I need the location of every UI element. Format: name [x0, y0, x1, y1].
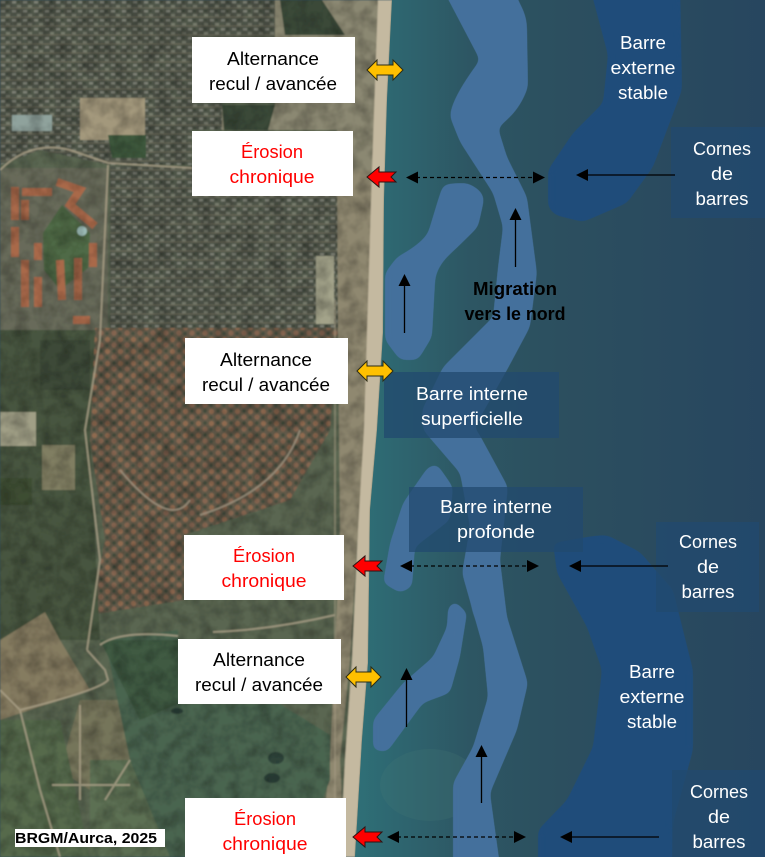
callout: erosion 3: chronique — [222, 834, 308, 854]
panel: cornes de barres 2: barres — [682, 582, 734, 602]
inner bars group — [373, 0, 537, 857]
arrow: dashed width 1 — [406, 172, 545, 184]
callout: alternance 2: recul / avancée — [202, 375, 330, 395]
inner sand bar: serpentine — [422, 0, 537, 857]
label: barre externe stable north: externe — [610, 58, 676, 78]
callout: alternance 1: recul / avancée — [209, 74, 337, 94]
panel: cornes de barres 3: barres — [692, 832, 746, 852]
panel: barre interne profonde — [409, 487, 583, 552]
tracks and roads — [0, 148, 335, 857]
resort and sandy lot — [12, 98, 146, 158]
label: migration vers le nord — [464, 279, 566, 324]
arrow: red 1 — [367, 167, 396, 187]
arrow: migration north 1 — [510, 208, 522, 267]
southern dune strip — [320, 170, 376, 857]
label: migration vers le nord: Migration — [473, 279, 557, 299]
panel: barre interne profonde: profonde — [457, 522, 535, 542]
arrow: cornes pointer 1 — [576, 169, 675, 181]
dark pine woods — [222, 0, 345, 130]
panel: barre interne superficielle — [384, 372, 559, 438]
texture grain — [0, 0, 395, 857]
callout: alternance 3: Alternance — [213, 650, 305, 670]
callout: alternance 2: Alternance — [220, 350, 312, 370]
callout: alternance 3: recul / avancée — [195, 675, 323, 695]
arrow: red 3 — [353, 827, 382, 847]
panel: cornes de barres 3 — [672, 770, 765, 857]
beach sand — [340, 0, 392, 857]
panel: cornes de barres 2: de — [697, 557, 719, 577]
panel: cornes de barres 2 — [656, 522, 759, 612]
callout: erosion 2: chronique — [222, 571, 306, 591]
apartment blocks — [0, 168, 108, 330]
sea — [355, 0, 765, 857]
callout: erosion 2: Érosion — [233, 546, 295, 566]
dark ponds — [171, 708, 284, 783]
panel: barre interne profonde: Barre interne — [440, 497, 552, 517]
arrow: migration north 3 — [400, 668, 412, 727]
arrow: yellow double 2 — [357, 361, 393, 381]
callout: alternance 3 — [178, 639, 341, 704]
panel: cornes de barres 1: barres — [696, 189, 748, 209]
panel: cornes de barres 3: de — [708, 807, 730, 827]
arrow: yellow double 3 — [346, 667, 381, 687]
inner bar lobe centre — [383, 464, 453, 593]
northern dunes — [222, 0, 385, 170]
label: barre externe stable north: stable — [618, 83, 668, 103]
panel: barre interne superficielle: Barre interne — [416, 384, 528, 404]
arrow: yellow double 1 — [367, 60, 403, 80]
arrow: dashed width 3 — [387, 831, 526, 843]
label: barre externe stable south: Barre — [629, 662, 675, 682]
panel: cornes de barres 1 — [671, 127, 765, 218]
arrow: red 2 — [353, 556, 382, 576]
label: barre externe stable south: stable — [627, 712, 677, 732]
central campsite district — [110, 166, 338, 336]
land base — [0, 0, 400, 857]
callout: erosion 3: Érosion — [234, 809, 296, 829]
label: barre externe stable north: Barre — [620, 33, 666, 53]
label: barre externe stable north — [610, 33, 676, 103]
callout: erosion 1 — [192, 131, 353, 196]
credit label: BRGM/Aurca, 2025 — [15, 831, 157, 847]
panel: cornes de barres 1: de — [711, 164, 733, 184]
aerial photo background — [0, 0, 400, 857]
arrow: migration north 4 — [476, 745, 488, 803]
outer bar north — [548, 0, 682, 222]
inner bar lobe north — [385, 183, 484, 360]
callout: erosion 1: Érosion — [241, 142, 303, 162]
panel: cornes de barres 1: Cornes — [693, 139, 751, 159]
panel: barre interne superficielle: superficielle — [421, 409, 523, 429]
western woodland — [0, 330, 100, 640]
outer bars group — [538, 0, 693, 857]
arrow: cornes pointer 2 — [569, 560, 668, 572]
label: barre externe stable south: externe — [620, 687, 684, 707]
label: barre externe stable south — [620, 662, 684, 732]
callout: alternance 1: Alternance — [227, 49, 319, 69]
callout: erosion 1: chronique — [230, 167, 314, 187]
arrow: migration north 2 — [398, 274, 410, 333]
shallow water patch — [380, 749, 480, 821]
southern marsh — [105, 630, 330, 857]
inner bar lobe south — [373, 601, 467, 752]
northern campsite district — [0, 0, 280, 165]
panel: cornes de barres 3: Cornes — [690, 782, 748, 802]
callout: alternance 2 — [185, 338, 348, 404]
callout: erosion 2 — [184, 535, 344, 600]
outer bar south — [538, 535, 693, 857]
callout: erosion 3 — [185, 798, 346, 857]
arrow: dashed width 2 — [400, 560, 539, 572]
southern fields — [0, 612, 170, 857]
panel: cornes de barres 2: Cornes — [679, 532, 737, 552]
southern circular housing estate — [90, 328, 338, 615]
callout: alternance 1 — [192, 37, 355, 103]
label: migration vers le nord: vers le nord — [464, 304, 566, 324]
sports courts — [316, 256, 334, 324]
arrow: cornes pointer 3 — [560, 831, 659, 843]
